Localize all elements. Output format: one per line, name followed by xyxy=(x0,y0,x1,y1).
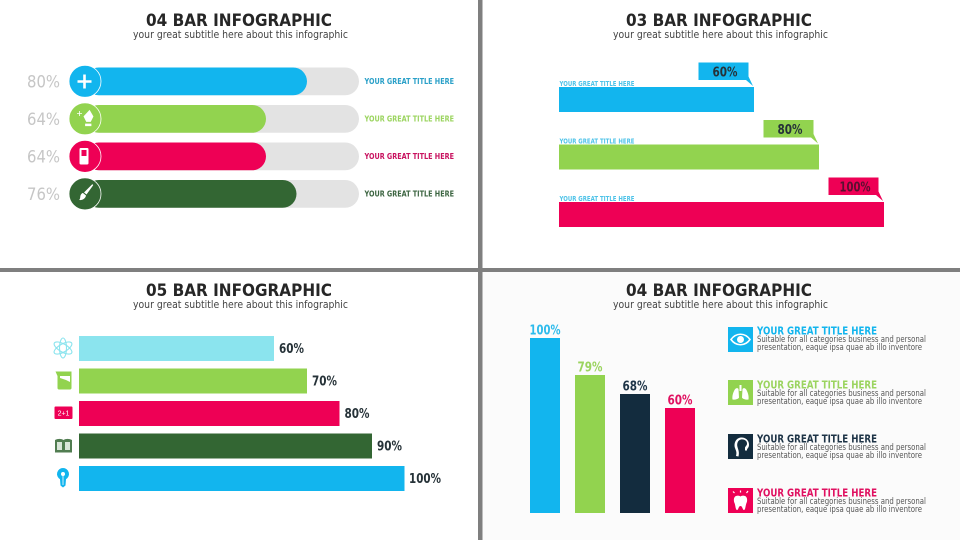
subtitle: panel 2: your great subtitle here about this infographic xyxy=(613,28,828,41)
row: 100% xyxy=(559,178,884,227)
row: 70% xyxy=(56,368,337,394)
subtitle: panel 1: your great subtitle here about this infographic xyxy=(133,28,348,41)
heading: panel 4: 04 BAR INFOGRAPHIC xyxy=(626,281,812,301)
row: 80% blue xyxy=(27,65,454,97)
row: 100%: 100% xyxy=(409,472,441,487)
legend item: head: presentation, eaque ipsa quae ab illo inventore xyxy=(757,451,922,461)
legend item: eye: presentation, eaque ipsa quae ab illo inventore xyxy=(757,343,922,353)
legend item: eye xyxy=(728,324,926,353)
column: 60% xyxy=(665,394,695,513)
legend item: lungs: Suitable for all categories business and personal xyxy=(757,389,926,399)
legend item: tooth: YOUR GREAT TITLE HERE xyxy=(756,486,877,500)
row: 60%: YOUR GREAT TITLE HERE xyxy=(559,80,635,88)
row: 80% blue: YOUR GREAT TITLE HERE xyxy=(364,77,454,86)
row: 60%: 60% xyxy=(279,342,304,357)
row: 64% green xyxy=(27,103,454,135)
row: 60%: 60% xyxy=(712,65,738,80)
heading: panel 2: 03 BAR INFOGRAPHIC xyxy=(626,11,812,31)
panel: 05 bar horizontal chart xyxy=(52,281,441,491)
legend item: lungs xyxy=(728,378,926,407)
row: 100% xyxy=(57,466,441,491)
column: 60%: 60% xyxy=(668,394,692,408)
column: 100%: 100% xyxy=(530,324,560,338)
legend item: head xyxy=(728,432,926,461)
row: 80%: 80% xyxy=(778,123,802,138)
column: 68%: 68% xyxy=(622,380,648,394)
subtitle: panel 4: your great subtitle here about this infographic xyxy=(613,298,828,311)
column: 100% xyxy=(530,324,560,513)
row: 80%: 80% xyxy=(344,407,370,422)
row: 100%: 100% xyxy=(840,180,870,196)
row: 60% xyxy=(52,336,304,361)
row: 100%: YOUR GREAT TITLE HERE xyxy=(559,195,635,203)
row: 64% pink xyxy=(27,140,454,172)
row: 80% xyxy=(54,401,370,426)
row: 80% blue: 80% xyxy=(27,72,60,92)
row: 64% pink: 64% xyxy=(27,148,60,168)
column: 68% xyxy=(620,380,650,513)
row: 64% green: 64% xyxy=(27,110,60,130)
row: 80% xyxy=(559,120,819,170)
row: 76% dark green: YOUR GREAT TITLE HERE xyxy=(364,189,454,198)
row: 80%: YOUR GREAT TITLE HERE xyxy=(559,138,635,146)
row: 76% dark green: 76% xyxy=(27,185,60,205)
legend item: head: Suitable for all categories business and personal xyxy=(757,443,926,453)
row: 64% pink: YOUR GREAT TITLE HERE xyxy=(364,152,454,161)
panel: 03 bar callout chart xyxy=(559,11,884,227)
row: 90% xyxy=(55,434,402,458)
legend item: eye: Suitable for all categories business and personal xyxy=(757,335,926,345)
legend item: eye: YOUR GREAT TITLE HERE xyxy=(756,324,877,338)
legend item: tooth: Suitable for all categories business and personal xyxy=(757,497,926,507)
column: 79%: 79% xyxy=(578,360,602,376)
row: 64% green: YOUR GREAT TITLE HERE xyxy=(364,114,454,123)
panel: 04 bar pill chart xyxy=(27,11,454,210)
column: 79% xyxy=(575,360,605,513)
heading: panel 3: 05 BAR INFOGRAPHIC xyxy=(146,281,332,301)
row: 60% xyxy=(559,62,754,112)
panel: 04 bar column chart xyxy=(530,281,926,515)
legend item: lungs: presentation, eaque ipsa quae ab illo inventore xyxy=(757,397,922,407)
legend item: head: YOUR GREAT TITLE HERE xyxy=(756,432,877,446)
row: 80%: 2+1 xyxy=(58,410,70,418)
row: 70%: 70% xyxy=(312,374,337,389)
row: 90%: 90% xyxy=(377,439,402,454)
legend item: tooth: presentation, eaque ipsa quae ab illo inventore xyxy=(757,505,922,515)
legend item: tooth xyxy=(728,486,926,515)
row: 76% dark green xyxy=(27,178,454,210)
subtitle: panel 3: your great subtitle here about this infographic xyxy=(133,298,348,311)
legend item: lungs: YOUR GREAT TITLE HERE xyxy=(756,378,877,392)
heading: panel 1: 04 BAR INFOGRAPHIC xyxy=(146,11,332,31)
